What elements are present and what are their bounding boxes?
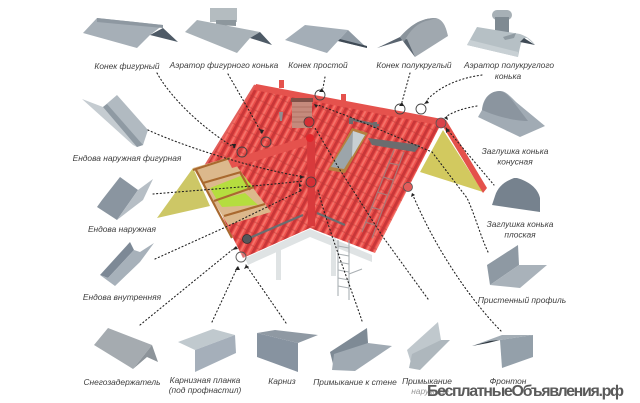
icon: gable trim (472, 335, 533, 368)
label: figured ridge: Конек фигурный (94, 61, 160, 71)
roof illustration (157, 80, 487, 300)
rafters (193, 158, 265, 238)
icon: semicircular ridge aerator (467, 10, 535, 57)
main roof tiles (205, 85, 442, 258)
icon: outer valley (97, 177, 153, 220)
icon: snow guard (94, 328, 158, 369)
label: eave strip: (под профнастил) (169, 385, 241, 395)
label: snow guard: Снегозадержатель (83, 377, 161, 387)
chimney (291, 98, 313, 128)
icon: outer abutment (407, 322, 450, 370)
green insulation patches (210, 175, 258, 207)
label: outer abutment: наружное (411, 386, 449, 396)
label: gable trim: Фронтон (490, 376, 527, 386)
wall ladder (338, 240, 362, 300)
roof ladder (362, 150, 404, 238)
label: plain ridge: Конек простой (288, 60, 348, 70)
right gable wall (420, 130, 483, 192)
left gable wall (157, 168, 210, 218)
snow bars lower (247, 213, 345, 239)
ridge vents (279, 80, 284, 88)
label: eave strip: Карнизная планка (170, 375, 240, 385)
icon: semicircular ridge (377, 18, 448, 57)
icon: flat ridge cap (492, 178, 540, 212)
valley (307, 138, 315, 226)
roof deck (193, 157, 271, 225)
label: figured outer valley: Ендова наружная фигурная (73, 153, 182, 163)
callout markers (231, 88, 450, 270)
icon: wall profile (487, 245, 547, 288)
small vent on slope (279, 112, 283, 121)
icon: plain ridge (285, 25, 367, 53)
label: semicircular ridge aerator: Аэратор полукруглого (464, 60, 554, 70)
gutter and downpipes (245, 229, 372, 280)
front gable ridge (228, 137, 311, 168)
upper snow bar (349, 118, 379, 128)
dotted leader lines (140, 73, 501, 331)
labels (73, 60, 566, 396)
label: flat ridge cap: Заглушка конька (487, 219, 553, 229)
label: inner valley: Ендова внутренняя (83, 292, 162, 302)
dark shelf walkway (368, 138, 420, 152)
label: eave: Карниз (268, 376, 296, 386)
icon: eave (257, 330, 318, 372)
icon: wall abutment (330, 328, 392, 371)
label: figured ridge aerator: Аэратор фигурного конька (169, 60, 279, 70)
label: wall abutment: Примыкание к стене (313, 377, 397, 387)
watermark: БесплатныеОбъявления.рф (427, 383, 624, 400)
right verge (439, 120, 487, 193)
label: flat ridge cap: плоская (504, 230, 536, 240)
label: conical ridge cap: Заглушка конька (482, 146, 548, 156)
icon: inner valley (100, 242, 154, 286)
icon: figured ridge aerator (185, 8, 272, 53)
icon: figured ridge (83, 18, 178, 48)
icon: conical ridge cap (478, 91, 545, 137)
icon: eave strip (178, 329, 236, 372)
label: wall profile: Пристенный профиль (478, 295, 566, 305)
icon: figured outer valley (82, 95, 148, 147)
left verge (205, 85, 255, 166)
label: conical ridge cap: конусная (497, 156, 533, 166)
label: outer abutment: Примыкание (402, 376, 452, 386)
label: semicircular ridge aerator: конька (495, 71, 521, 81)
roof ridge (254, 84, 443, 126)
label: semicircular ridge: Конек полукруглый (376, 60, 452, 70)
label: outer valley: Ендова наружная (88, 224, 157, 234)
roof window (328, 128, 368, 173)
